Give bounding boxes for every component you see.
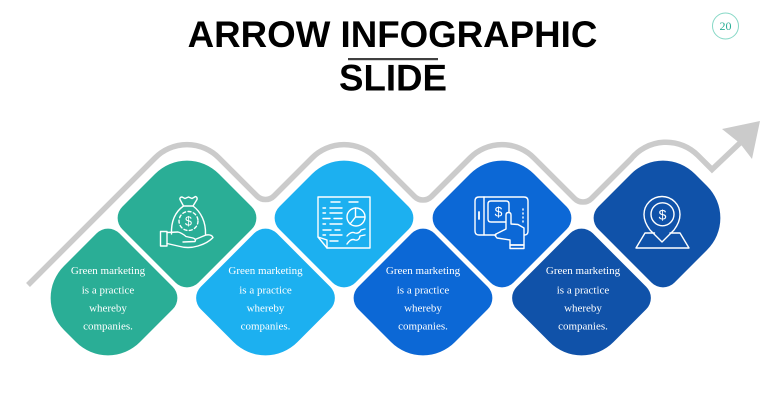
icon: money bag in hand bbox=[160, 196, 213, 248]
title: SLIDE bbox=[339, 58, 447, 98]
panel: top navy diamond bbox=[594, 161, 720, 287]
text: blue card: companies. bbox=[398, 320, 448, 332]
text: sky card: Green marketing bbox=[228, 265, 303, 277]
text: blue card: Green marketing bbox=[386, 265, 461, 277]
panel: bottom green diamond bbox=[51, 229, 177, 355]
growth arrow bbox=[28, 121, 760, 285]
text: sky card: whereby bbox=[247, 302, 285, 314]
text: blue card: whereby bbox=[404, 302, 442, 314]
text: navy card: is a practice bbox=[557, 284, 609, 296]
text: blue card: is a practice bbox=[397, 284, 449, 296]
text: navy card: whereby bbox=[564, 302, 602, 314]
icon: report document bbox=[318, 197, 370, 248]
panel: top sky diamond bbox=[275, 161, 413, 287]
text: green card: companies. bbox=[83, 320, 133, 332]
text: navy card: Green marketing bbox=[546, 265, 621, 277]
text: sky card: is a practice bbox=[239, 284, 292, 296]
icon: tablet with pointing hand bbox=[475, 197, 528, 248]
title bbox=[188, 14, 597, 98]
text: navy card: companies. bbox=[558, 320, 608, 332]
page number badge bbox=[712, 13, 738, 39]
title: ARROW INFOGRAPHIC bbox=[188, 14, 597, 55]
page number badge: 20 bbox=[720, 19, 732, 33]
text: green card: is a practice bbox=[82, 284, 134, 296]
icon: money bag in hand: $ bbox=[185, 214, 192, 228]
icon: tablet with pointing hand: $ bbox=[495, 204, 503, 220]
panel: top green diamond bbox=[118, 161, 256, 287]
title underline bbox=[348, 58, 438, 60]
icon: map pin with dollar: $ bbox=[659, 206, 667, 222]
icon: map pin with dollar bbox=[636, 196, 689, 248]
panel: bottom sky diamond bbox=[196, 229, 335, 355]
text: green card: Green marketing bbox=[71, 265, 146, 277]
panel: bottom blue diamond bbox=[354, 229, 492, 355]
panel: bottom navy diamond bbox=[512, 229, 651, 355]
text: green card: whereby bbox=[89, 302, 127, 314]
panel: top blue diamond bbox=[433, 161, 571, 287]
text: sky card: companies. bbox=[241, 320, 291, 332]
